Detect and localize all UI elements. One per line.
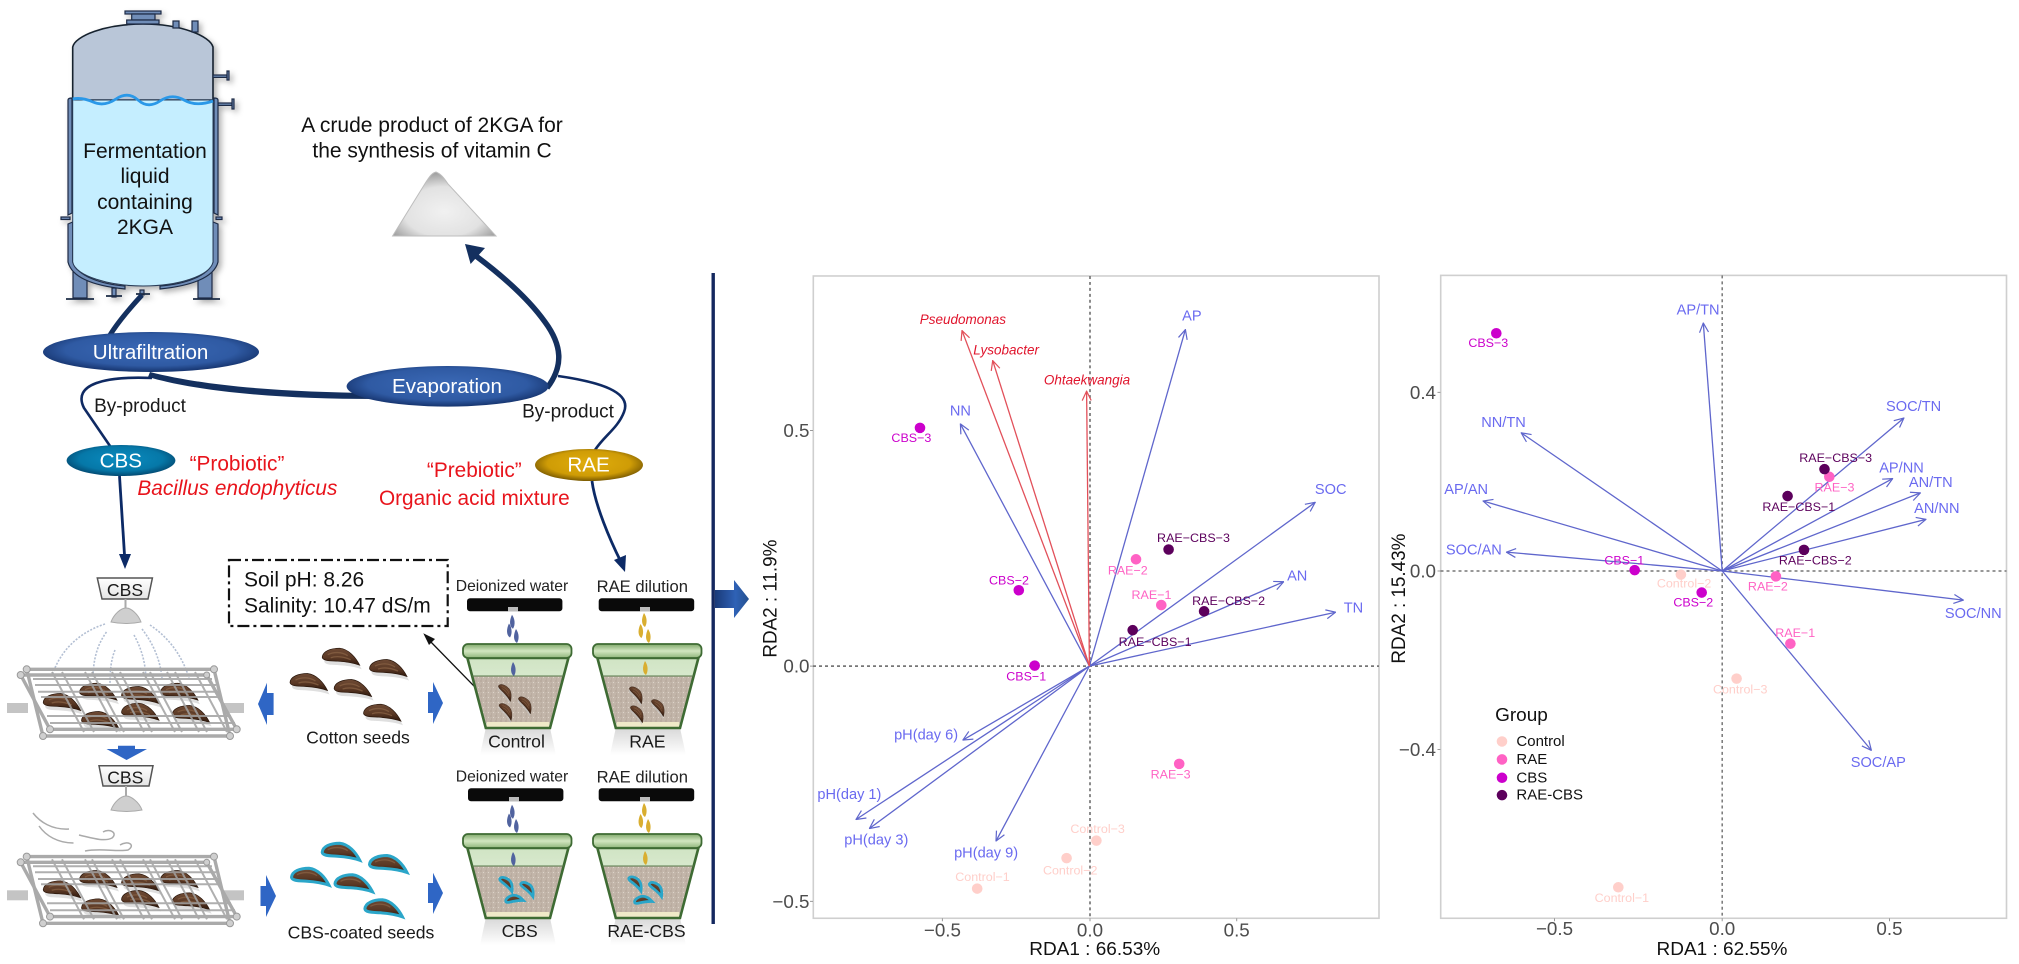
vector: pH day 1 (817, 666, 1089, 819)
pot: RAE-CBS (593, 768, 702, 945)
arrow: seeds to rack (258, 683, 274, 725)
samples: RAE-CBS: RAE−CBS−1 (1762, 500, 1835, 514)
vector: pH day 3: pH(day 3) (844, 833, 908, 849)
samples: CBS (891, 423, 1046, 683)
x axis ticks (924, 919, 1250, 940)
arrow: RAE to dilution (592, 481, 626, 572)
node: RAE: RAE (567, 454, 610, 476)
prebiotic caption: “Prebiotic” (427, 458, 522, 482)
samples: CBS: CBS−1 (1604, 554, 1644, 568)
arrow: process to results (715, 580, 749, 618)
samples: RAE-CBS: RAE−CBS−2 (1779, 554, 1852, 568)
arrow: rack to drying (106, 746, 147, 760)
tank label: 2KGA (117, 216, 173, 238)
legend: group: RAE (1516, 751, 1547, 768)
samples: RAE-CBS: RAE−CBS−3 (1157, 531, 1230, 545)
chart: RDA biplot soil properties (760, 276, 1379, 960)
vector: Lysobacter: Lysobacter (973, 342, 1039, 357)
vector: SOC/NN (1722, 571, 2002, 622)
vector: AN/TN (1722, 475, 1953, 571)
soil properties box: Soil pH: 8.26 (244, 568, 364, 592)
pot: Control: Control (488, 732, 545, 752)
pot: Control: Deionized water (456, 578, 568, 595)
samples: Control (955, 822, 1125, 894)
vector: SOC/TN (1722, 399, 1941, 571)
x axis ticks: −0.5 (1536, 918, 1573, 939)
vector: Lysobacter (973, 342, 1089, 666)
divider line (712, 273, 715, 924)
arrow: CBS to sprayer (119, 476, 131, 569)
pot: RAE-CBS: RAE-CBS (607, 921, 686, 941)
pot: RAE (593, 577, 702, 755)
vector: AN (1089, 568, 1307, 666)
sprayer and drying air (33, 766, 153, 851)
sprayer: CBS coating: CBS (107, 580, 143, 600)
vector: SOC/AN: SOC/AN (1446, 543, 1502, 559)
samples: Control: Control−2 (1657, 577, 1711, 590)
panel: production process (7, 11, 702, 945)
vector: pH day 6: pH(day 6) (894, 728, 958, 744)
CBS-coated seeds group: CBS-coated seeds (288, 923, 435, 943)
x axis ticks: 0.0 (1077, 919, 1103, 940)
soil properties box: Salinity: 10.47 dS/m (244, 594, 431, 618)
cotton seeds group: Cotton seeds (306, 728, 410, 748)
vector: AP/TN: AP/TN (1677, 303, 1720, 319)
y axis ticks: −0.4 (1399, 739, 1436, 760)
flow: tank to ultrafiltration (110, 295, 142, 335)
node: evaporation (347, 366, 549, 407)
x axis ticks: 0.0 (1709, 918, 1735, 939)
vector: pH day 6 (894, 666, 1089, 744)
y axis ticks: −0.5 (772, 891, 809, 912)
pot: RAE-CBS: RAE dilution (597, 768, 688, 787)
pot: CBS: Deionized water (456, 769, 568, 786)
samples: Control: Control−3 (1713, 682, 1768, 696)
flow: by-product to RAE (558, 376, 625, 450)
vector: AP/AN (1444, 482, 1722, 571)
vector: AN: AN (1287, 568, 1307, 584)
vector: pH day 1: pH(day 1) (817, 787, 881, 803)
CBS-coated seeds group (288, 843, 435, 943)
cotton seeds group (290, 648, 410, 748)
y axis ticks: 0.4 (1410, 382, 1436, 403)
x axis ticks (1536, 918, 1903, 939)
vector: NN: NN (950, 404, 971, 420)
vector: pH day 9 (954, 666, 1089, 862)
samples: CBS: CBS−3 (891, 431, 931, 445)
vector: SOC/AN (1446, 543, 1722, 571)
pot: RAE: RAE dilution (597, 577, 688, 596)
prebiotic caption: Organic acid mixture (379, 486, 570, 510)
samples: RAE-CBS: RAE−CBS−1 (1119, 635, 1192, 649)
crude product caption: A crude product of 2KGA for (301, 114, 563, 136)
vector: AP (1089, 309, 1202, 666)
arrow: coated seeds to pots (428, 873, 443, 914)
samples: CBS: CBS−3 (1468, 336, 1508, 350)
node: ultrafiltration (43, 332, 259, 372)
x axis ticks: 0.5 (1224, 919, 1250, 940)
y axis ticks (772, 420, 810, 912)
x axis title: RDA1 : 66.53% (1029, 939, 1160, 960)
vector: SOC: SOC (1315, 482, 1347, 498)
y axis ticks: 0.0 (783, 656, 809, 677)
wire rack with cotton seeds (7, 666, 244, 740)
samples: RAE: RAE−3 (1815, 481, 1855, 495)
legend: group: CBS (1516, 769, 1547, 786)
y axis title: RDA2 : 15.43% (1389, 533, 1410, 664)
vector: AN/TN: AN/TN (1909, 475, 1953, 491)
crude product caption: the synthesis of vitamin C (312, 139, 552, 162)
samples: Control: Control−2 (1043, 864, 1098, 878)
samples: RAE: RAE−2 (1748, 580, 1788, 594)
x axis ticks: −0.5 (924, 919, 961, 940)
arrow: evaporation to crude product (465, 244, 559, 388)
samples: RAE: RAE−1 (1132, 588, 1172, 602)
vector: SOC/AP (1722, 571, 1906, 771)
vector: SOC/NN: SOC/NN (1945, 606, 2002, 622)
vector: NN/TN (1481, 415, 1722, 571)
vector: Pseudomonas (920, 312, 1089, 666)
samples: CBS: CBS−2 (989, 573, 1029, 587)
vector: SOC/TN: SOC/TN (1886, 399, 1941, 415)
arrow: coated rack to seeds (260, 875, 276, 917)
y axis ticks: 0.0 (1410, 561, 1436, 581)
probiotic caption: “Probiotic” (190, 452, 284, 475)
vector: TN (1089, 601, 1363, 666)
samples: RAE-CBS (1119, 531, 1265, 649)
node: evaporation: Evaporation (392, 375, 502, 398)
vector: pH day 3 (844, 666, 1089, 849)
vector: AP/TN (1677, 303, 1722, 571)
label: by-product right: By-product (522, 402, 615, 422)
legend: group: RAE-CBS (1516, 787, 1583, 804)
arrow: seeds to control pots (428, 682, 443, 724)
samples: RAE: RAE−2 (1108, 564, 1148, 577)
pot: CBS (456, 769, 572, 945)
y axis ticks: 0.5 (783, 420, 809, 441)
vector: NN (950, 404, 1089, 666)
x axis title: RDA1 : 62.55% (1657, 939, 1788, 960)
samples: RAE-CBS (1762, 451, 1872, 568)
node: ultrafiltration: Ultrafiltration (93, 341, 208, 364)
flow: by-product to CBS (82, 378, 152, 446)
samples: RAE (1748, 472, 1855, 649)
vector: AN/NN (1722, 501, 1959, 571)
vector: Ohtaekwangia: Ohtaekwangia (1044, 372, 1131, 387)
y axis ticks (1399, 382, 1436, 760)
chart: RDA biplot nutrient ratios (1389, 275, 2006, 960)
node: RAE (535, 449, 643, 481)
samples: CBS: CBS−1 (1006, 669, 1046, 683)
y axis title: RDA2 : 11.9% (760, 539, 782, 658)
tank label: Fermentation (83, 140, 207, 162)
samples: Control: Control−3 (1070, 822, 1125, 836)
legend: group (1495, 705, 1583, 804)
node: CBS: CBS (100, 450, 142, 472)
tank label: liquid (120, 164, 170, 188)
arrow: soil to properties box (423, 633, 484, 697)
vector: NN/TN: NN/TN (1481, 415, 1526, 431)
vector: AP: AP (1182, 309, 1202, 325)
vector: AP/NN: AP/NN (1879, 460, 1924, 476)
legend: group: Control (1516, 733, 1565, 750)
vector: Pseudomonas: Pseudomonas (920, 312, 1006, 327)
vector: AP/AN: AP/AN (1444, 482, 1488, 498)
soil properties box (229, 560, 448, 626)
node: CBS (67, 445, 175, 476)
samples: Control: Control−1 (955, 870, 1010, 884)
samples: RAE: RAE−1 (1775, 626, 1815, 640)
vector: SOC/AP: SOC/AP (1851, 755, 1906, 771)
samples: Control: Control−1 (1595, 891, 1649, 905)
icon: powder pile (393, 172, 496, 236)
samples: RAE (1108, 554, 1191, 782)
flow: ultrafiltration to evaporation (148, 372, 375, 399)
fermentation tank (61, 11, 234, 299)
pot: Control (456, 578, 572, 755)
sprayer: CBS coating (52, 578, 189, 685)
samples: RAE-CBS: RAE−CBS−3 (1799, 451, 1872, 465)
legend: group: Group (1495, 705, 1548, 726)
vector: SOC (1089, 482, 1347, 666)
vector: AP/NN (1722, 460, 1924, 571)
samples: Control (1595, 569, 1768, 905)
samples: CBS (1468, 328, 1713, 609)
samples: RAE: RAE−3 (1151, 768, 1191, 782)
label: by-product left: By-product (94, 396, 187, 417)
tank label: containing (97, 190, 193, 214)
samples: RAE-CBS: RAE−CBS−2 (1192, 594, 1265, 608)
vector: AN/NN: AN/NN (1914, 501, 1959, 517)
sprayer and drying air: CBS (107, 767, 143, 787)
wire rack with coated seeds (7, 853, 244, 927)
pot: RAE: RAE (629, 732, 665, 752)
vector: pH day 9: pH(day 9) (954, 846, 1018, 862)
x axis ticks: 0.5 (1876, 918, 1903, 939)
probiotic caption: Bacillus endophyticus (137, 476, 337, 500)
vector: TN: TN (1344, 601, 1363, 617)
samples: CBS: CBS−2 (1673, 595, 1713, 609)
pot: CBS: CBS (502, 921, 538, 941)
